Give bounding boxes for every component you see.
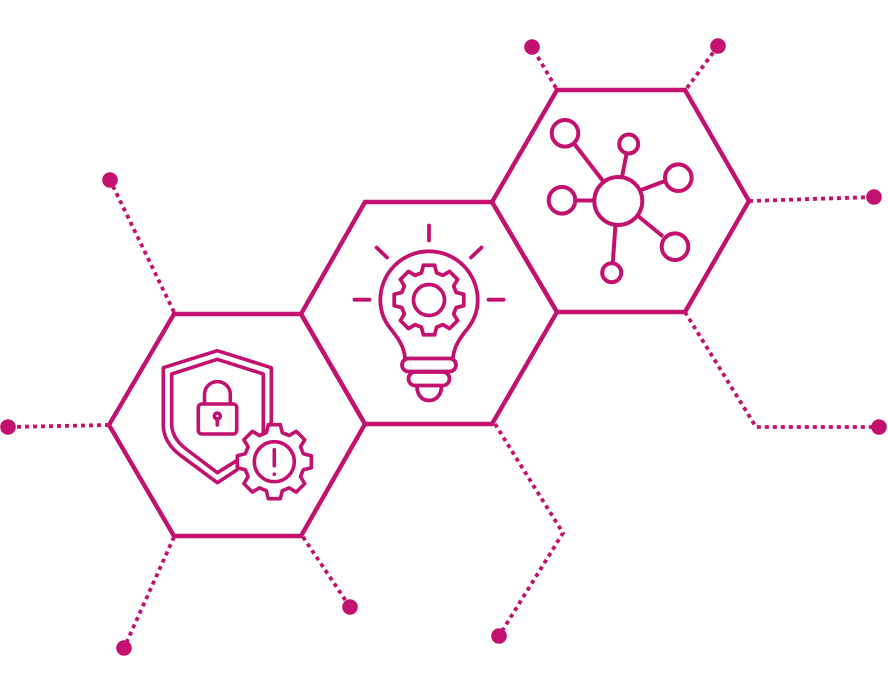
connector: right of network hexagon [749, 189, 882, 205]
icon: network nodes [549, 120, 692, 282]
light rays [354, 226, 504, 300]
hexagon: network [492, 90, 749, 312]
connector: bottom-left of security hexagon [116, 537, 174, 656]
hub [594, 177, 642, 225]
shield outline [163, 351, 271, 483]
connector: bottom-right of security hexagon [303, 537, 358, 615]
connector: top-left of network hexagon [524, 39, 556, 88]
icon: light bulb with gear [354, 226, 504, 400]
connector: top-left of security hexagon [102, 172, 174, 312]
hexagon: security [109, 314, 365, 536]
connector: left of security hexagon [0, 419, 109, 435]
icon: shield with lock and warning gear [163, 351, 311, 499]
bulb base [402, 358, 456, 400]
connector: bottom of idea hexagon [491, 424, 563, 644]
connector: bottom-right of network hexagon [685, 312, 887, 435]
bulb glass [380, 251, 478, 358]
connector: top-right of network hexagon [687, 38, 726, 88]
warning gear [237, 425, 311, 499]
padlock [198, 382, 237, 434]
spokes [574, 144, 665, 262]
gear in bulb [394, 265, 464, 335]
hexagon: idea [301, 202, 557, 424]
outer nodes [549, 120, 692, 282]
